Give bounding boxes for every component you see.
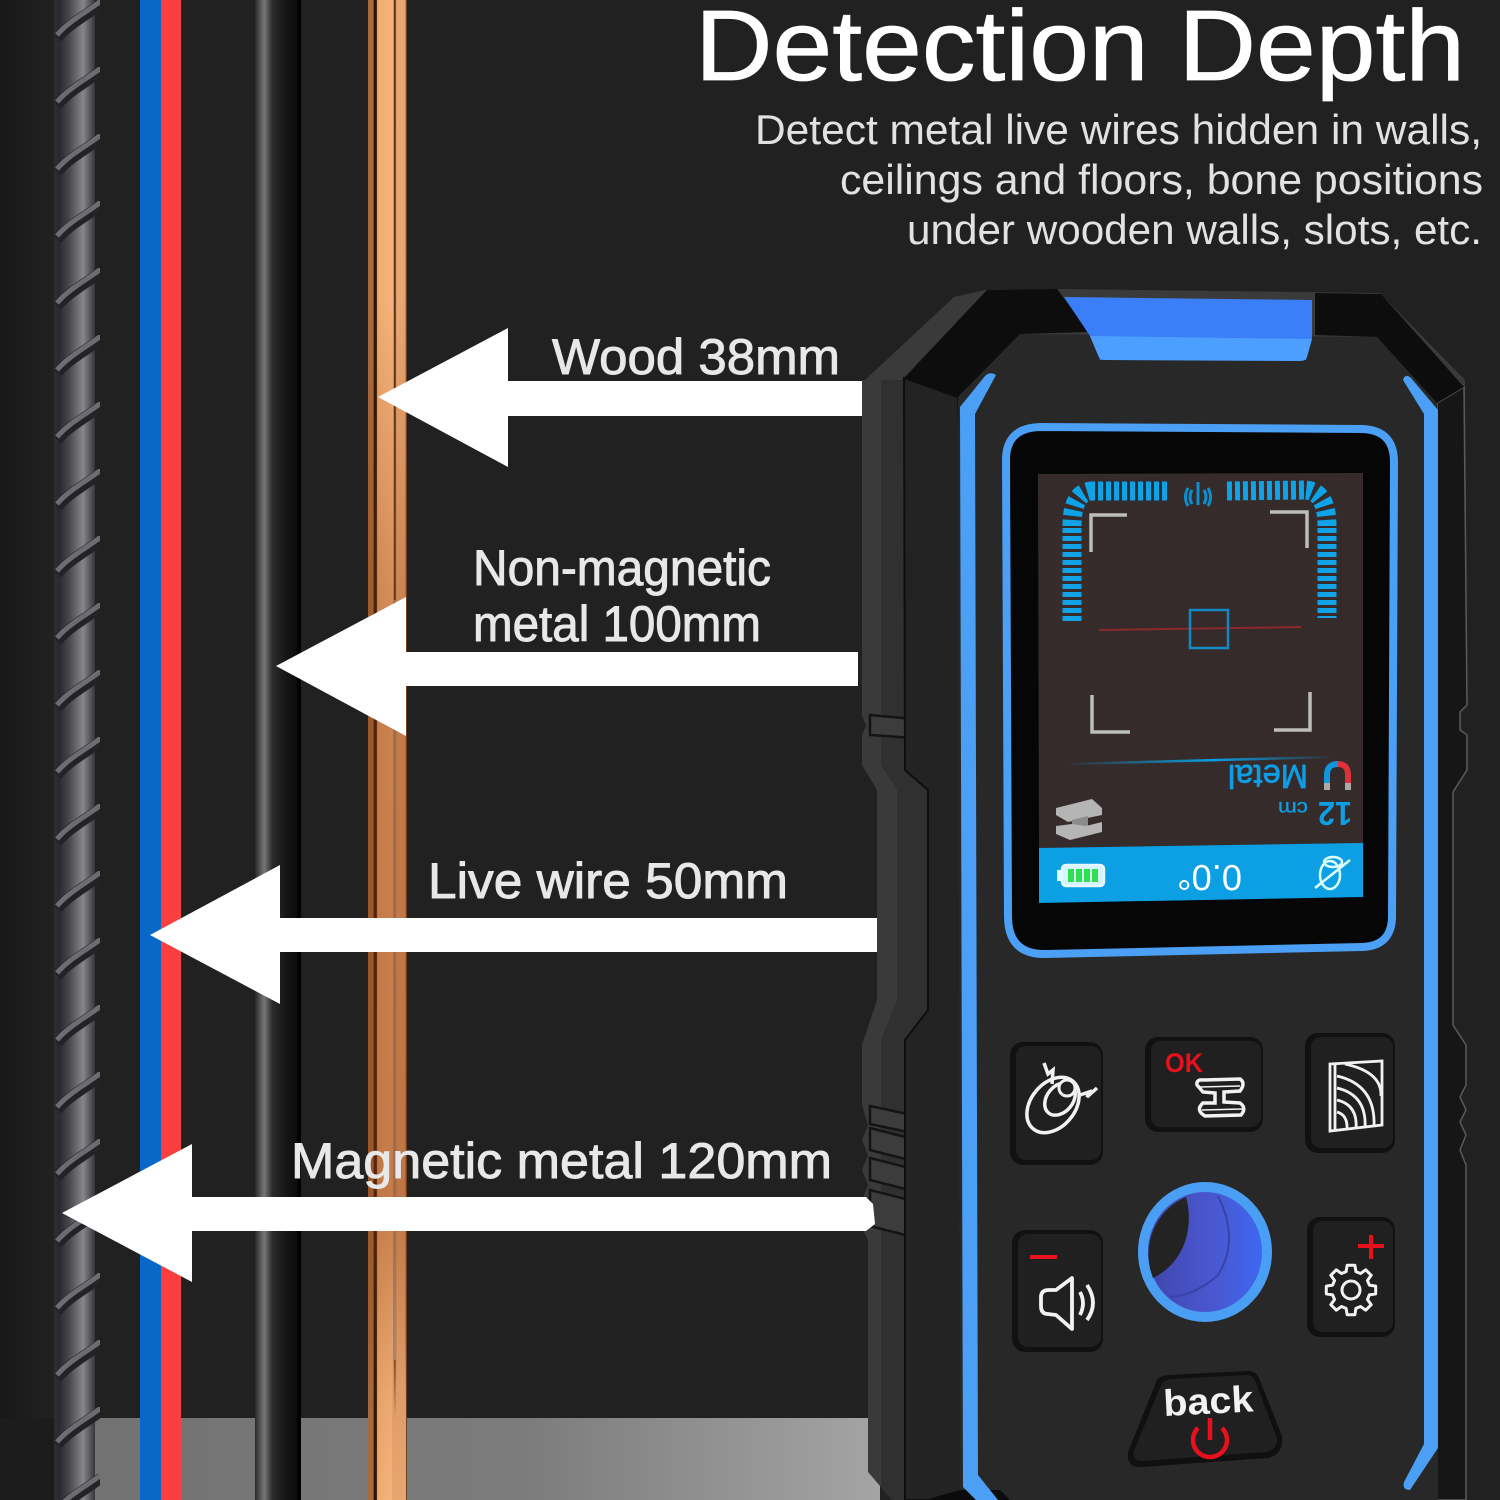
signal bars bbox=[1072, 490, 1327, 622]
target square bbox=[1190, 610, 1228, 648]
description text: Detect metal live wires hidden in walls, bbox=[755, 106, 1482, 153]
floor left shadow bbox=[0, 1418, 56, 1500]
button: back power bbox=[1128, 1371, 1282, 1467]
label: non-magnetic metal: metal 100mm bbox=[473, 596, 761, 652]
arrow: non-magnetic metal bbox=[276, 597, 858, 736]
floor bbox=[0, 1418, 880, 1500]
label: wood: Wood 38mm bbox=[552, 329, 840, 385]
label: magnetic metal: Magnetic metal 120mm bbox=[291, 1133, 832, 1189]
screen bezel bbox=[1006, 427, 1394, 954]
arrow: wood bbox=[378, 328, 866, 467]
viewfinder corners bbox=[1091, 512, 1310, 732]
button: back power: back bbox=[1162, 1378, 1255, 1424]
device bottom shadow bbox=[925, 1490, 1010, 1500]
depth unit: cm bbox=[1278, 797, 1308, 818]
description text: ceilings and floors, bone positions bbox=[840, 156, 1483, 203]
crosshair line bbox=[1099, 627, 1301, 630]
left wall shade bbox=[0, 0, 60, 1500]
label: non-magnetic metal bbox=[473, 540, 771, 652]
depth value: 12 bbox=[1318, 795, 1352, 832]
sound off icon bbox=[1315, 857, 1350, 889]
device: detector bbox=[862, 289, 1467, 1500]
label: non-magnetic metal: Non-magnetic bbox=[473, 540, 771, 596]
magnet icon bbox=[1327, 764, 1348, 790]
device inner side panel bbox=[881, 380, 928, 1500]
button: wood mode bbox=[1305, 1033, 1395, 1153]
blue trim right bbox=[1403, 376, 1438, 1490]
button: sound minus bbox=[1012, 1230, 1103, 1352]
device grip ribs bbox=[870, 715, 917, 1238]
steel beam icon bbox=[1056, 799, 1102, 840]
button: OK metal bbox=[1145, 1037, 1263, 1132]
device face bbox=[958, 334, 1438, 1500]
description text bbox=[755, 106, 1483, 253]
blue sensor window bbox=[1064, 297, 1312, 361]
blue wire bbox=[140, 0, 161, 1500]
device main body bbox=[904, 378, 1000, 1500]
button: live wire mode bbox=[1010, 1042, 1103, 1165]
battery icon bbox=[1057, 865, 1104, 886]
angle value: 0.0° bbox=[1177, 857, 1242, 898]
label: live wire: Live wire 50mm bbox=[428, 853, 788, 909]
LCD screen bbox=[1038, 473, 1363, 853]
button: settings plus bbox=[1307, 1217, 1395, 1337]
rebar rod bbox=[54, 0, 100, 1500]
device top corner left bbox=[904, 289, 1089, 397]
blue trim left bbox=[960, 373, 998, 1500]
device right edge strip bbox=[1437, 387, 1467, 1500]
button: OK metal: OK bbox=[1165, 1048, 1203, 1078]
screen divider bbox=[1065, 757, 1335, 764]
device top corner right bbox=[1315, 293, 1464, 403]
device shell silhouette bbox=[862, 289, 1467, 1500]
description text: under wooden walls, slots, etc. bbox=[907, 206, 1482, 253]
black pipe bbox=[255, 0, 301, 1500]
lens ring bbox=[1143, 1187, 1267, 1317]
arrow: live wire bbox=[150, 865, 880, 1004]
arrow: magnetic metal bbox=[62, 1144, 875, 1282]
copper pipe bbox=[368, 0, 407, 1500]
status bar bbox=[1039, 843, 1363, 903]
red wire bbox=[161, 0, 181, 1500]
signal icon bbox=[1186, 482, 1210, 506]
material label: Metal bbox=[1228, 758, 1308, 795]
